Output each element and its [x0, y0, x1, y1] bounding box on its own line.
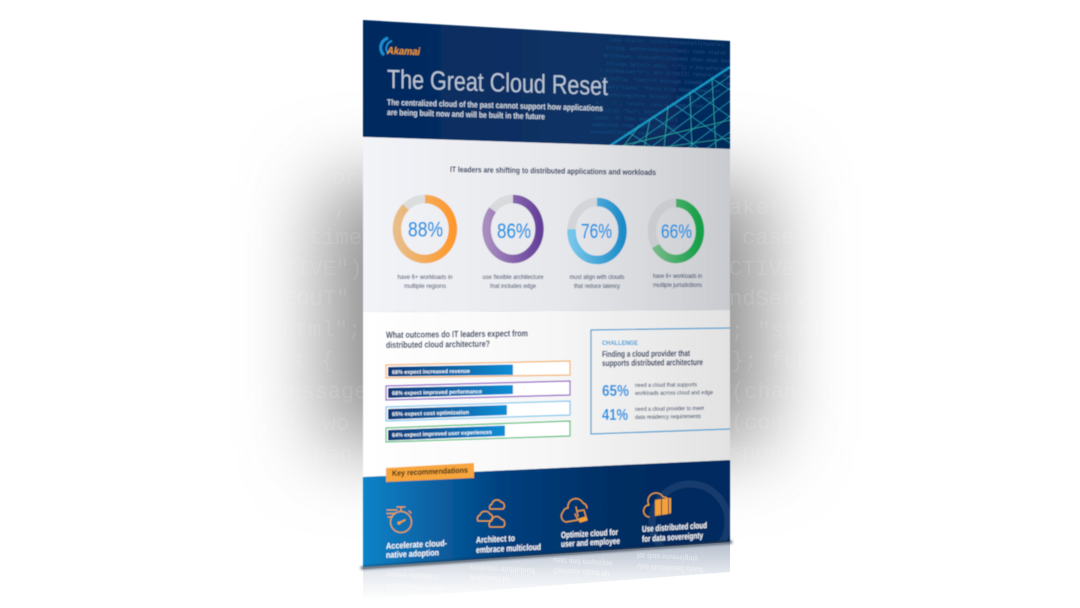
label 76%: must align with clouds [570, 274, 624, 281]
header code texture: n, _ := ; return; case n: time.After [596, 100, 704, 110]
recommendation text: data sovereignty: Use distributed cloud [642, 520, 707, 534]
background code text: case [742, 226, 795, 251]
donut 66% [652, 203, 700, 259]
label 76%: that reduce latency [574, 283, 621, 290]
background code text: ruct { [255, 349, 334, 374]
background code text: orr [332, 166, 372, 191]
bar: 65% cost optimization: 65% expect cost optimization [392, 410, 470, 418]
icon: stopwatch [387, 507, 412, 532]
header code texture: make(chan chan bool); select [592, 122, 676, 131]
challenge heading: Finding a cloud provider that [602, 348, 690, 359]
outcomes heading [386, 328, 528, 350]
recommendation text: data sovereignty: for data sovereignty [642, 530, 703, 544]
background code text: MEOUT" [270, 287, 349, 312]
bar: 68% increased revenue [386, 361, 570, 378]
bar: 64% improved user experiences: 64% expect improved user experiences [392, 430, 492, 439]
stat 65% [602, 382, 713, 400]
sheet bottom edge shadow [361, 542, 732, 568]
label 66%: have 6+ workloads in [653, 273, 702, 280]
label 76% [570, 274, 624, 290]
page: infographic sheet [361, 20, 751, 568]
recommendation text: multicloud: Architect to [476, 533, 515, 545]
background code text: html"; [282, 318, 361, 343]
label 66%: multiple jurisdictions [653, 282, 702, 289]
stat 65%: workloads across cloud and edge [634, 390, 713, 397]
decorative ring [652, 484, 728, 560]
background code text: spon [729, 441, 782, 466]
background shadow glow [325, 185, 765, 445]
background code text: (con [731, 411, 784, 436]
background code text: ake( [729, 196, 782, 221]
challenge heading: supports distributed architecture [602, 357, 703, 368]
page reflection: native adoption [386, 570, 439, 582]
label 88%: have 6+ workloads in [398, 274, 453, 281]
header code texture: WriteJson, statusPollChannel chan chan bool; bool [604, 53, 751, 66]
bar: 68% improved performance [386, 381, 570, 400]
page reflection: Accelerate cloud- [386, 581, 447, 593]
header code texture: string, workerCompleteChan); case status := [606, 45, 735, 57]
background code text: CTIVE [729, 257, 795, 282]
icon: clouds [477, 500, 505, 527]
bar: 65% cost optimization [386, 401, 570, 421]
header code texture: WriteString(Done Second); select { case [598, 92, 715, 102]
icon: cloud with hand [561, 499, 587, 522]
background code text: (chan [731, 380, 797, 405]
recommendation text: cloud-native: native adoption [386, 547, 439, 560]
header code texture: r.FormValue("n"), err Error(); return; r.Ho [600, 68, 729, 79]
challenge label: CHALLENGE [602, 341, 638, 347]
donut 76%: 76% [581, 221, 612, 243]
bar: 68% increased revenue: 68% expect increased revenue [392, 369, 470, 376]
panel: header [363, 20, 751, 149]
logo: Akamai: Akamai [386, 45, 421, 58]
background code text: ndServ [729, 287, 808, 312]
donut 88%: 88% [408, 218, 443, 242]
header code texture: Header("Cache" "force http ResponseWriter [598, 84, 721, 95]
header code texture: statusPollChan; case [590, 129, 650, 137]
label 66% [653, 273, 702, 289]
logo: Akamai [381, 38, 421, 58]
challenge callout [591, 328, 730, 434]
header network mesh [608, 67, 730, 149]
recommendation text: multicloud: embrace multicloud [476, 542, 541, 555]
background code text: , r : [334, 196, 400, 221]
panel: key recommendations [363, 460, 730, 567]
recommendation text: cloud-native: Accelerate cloud- [386, 538, 447, 551]
background code text: l); wo [270, 412, 349, 437]
challenge heading [602, 348, 703, 368]
background code text: Chan [300, 443, 353, 468]
bar: 64% improved user experiences [386, 421, 570, 442]
stat 41%: 41% [602, 407, 628, 424]
icon: cloud with servers [644, 493, 671, 517]
panel: IT leaders donut section [363, 137, 730, 312]
stat 65%: 65% [602, 383, 629, 400]
page reflection: Architect to [470, 573, 509, 584]
background code text: Message [275, 380, 367, 405]
background code text: ; "stri [731, 319, 823, 344]
background code text: }; func [731, 349, 823, 374]
recommendation text: optimize: Optimize cloud for [561, 527, 618, 540]
label 88% [398, 274, 453, 290]
bar: 68% improved performance: 68% expect improved performance [392, 389, 482, 397]
donut 86% [486, 199, 540, 259]
recommendations tag: Key recommendations [392, 466, 468, 478]
recommendation text: optimize: user and employee [561, 536, 620, 549]
stat 65%: need a cloud that supports [635, 382, 697, 389]
title: The Great Cloud Reset [387, 64, 609, 101]
page reflection: Use distributed cloud [637, 562, 703, 575]
header code texture [590, 38, 730, 135]
label 86% [482, 274, 544, 290]
page reflection: for data sovereignty [637, 551, 698, 563]
header code texture: println( "Yes"; html"; [596, 108, 662, 116]
recommendation text: optimize [561, 527, 620, 549]
donut 66%: 66% [661, 222, 692, 243]
recommendation text: cloud-native [386, 538, 447, 560]
stat 41% [602, 406, 704, 424]
outcomes heading: What outcomes do IT leaders expect from [386, 328, 528, 340]
recommendations tag [386, 463, 474, 482]
label 88%: multiple regions [404, 283, 446, 290]
outcomes heading: distributed cloud architecture? [386, 339, 490, 350]
stat 41%: data residency requirements [635, 414, 701, 421]
header code texture: count: 3; func main() { ctrl [594, 115, 678, 124]
background code text: time [309, 226, 362, 251]
recommendation text: data sovereignty [642, 520, 707, 544]
page reflection: user and employee [553, 556, 613, 568]
background code text: CTIVE") [270, 257, 362, 282]
label 86%: use flexible architecture [482, 274, 544, 281]
panel: outcomes and challenge section [363, 310, 730, 567]
subtitle: are being built now and will be built in the future [387, 107, 545, 121]
page reflection [363, 543, 730, 600]
subtitle [387, 97, 603, 121]
donut 86%: 86% [497, 220, 531, 243]
page reflection: Optimize cloud for [553, 566, 610, 578]
subtitle: The centralized cloud of the past cannot support how applications [387, 97, 603, 113]
label 86%: that includes edge [490, 283, 537, 290]
stat 41%: need a cloud provider to meet [635, 406, 704, 413]
section heading: IT leaders are shifting to distributed applications and workloads [450, 165, 656, 177]
donut 76% [572, 202, 623, 260]
donut 88% [397, 199, 453, 259]
page reflection: embrace multicloud [470, 563, 535, 576]
header code texture: Fprintf(w, "Control message issued for Target"); [600, 76, 744, 88]
background code text [255, 166, 823, 468]
header code texture: strings.Split(r.Host, ":"); r.ParseForm() [606, 61, 729, 73]
header code texture: case status: return FormatCall(handle); read [610, 37, 742, 49]
recommendation text: multicloud [476, 533, 541, 555]
